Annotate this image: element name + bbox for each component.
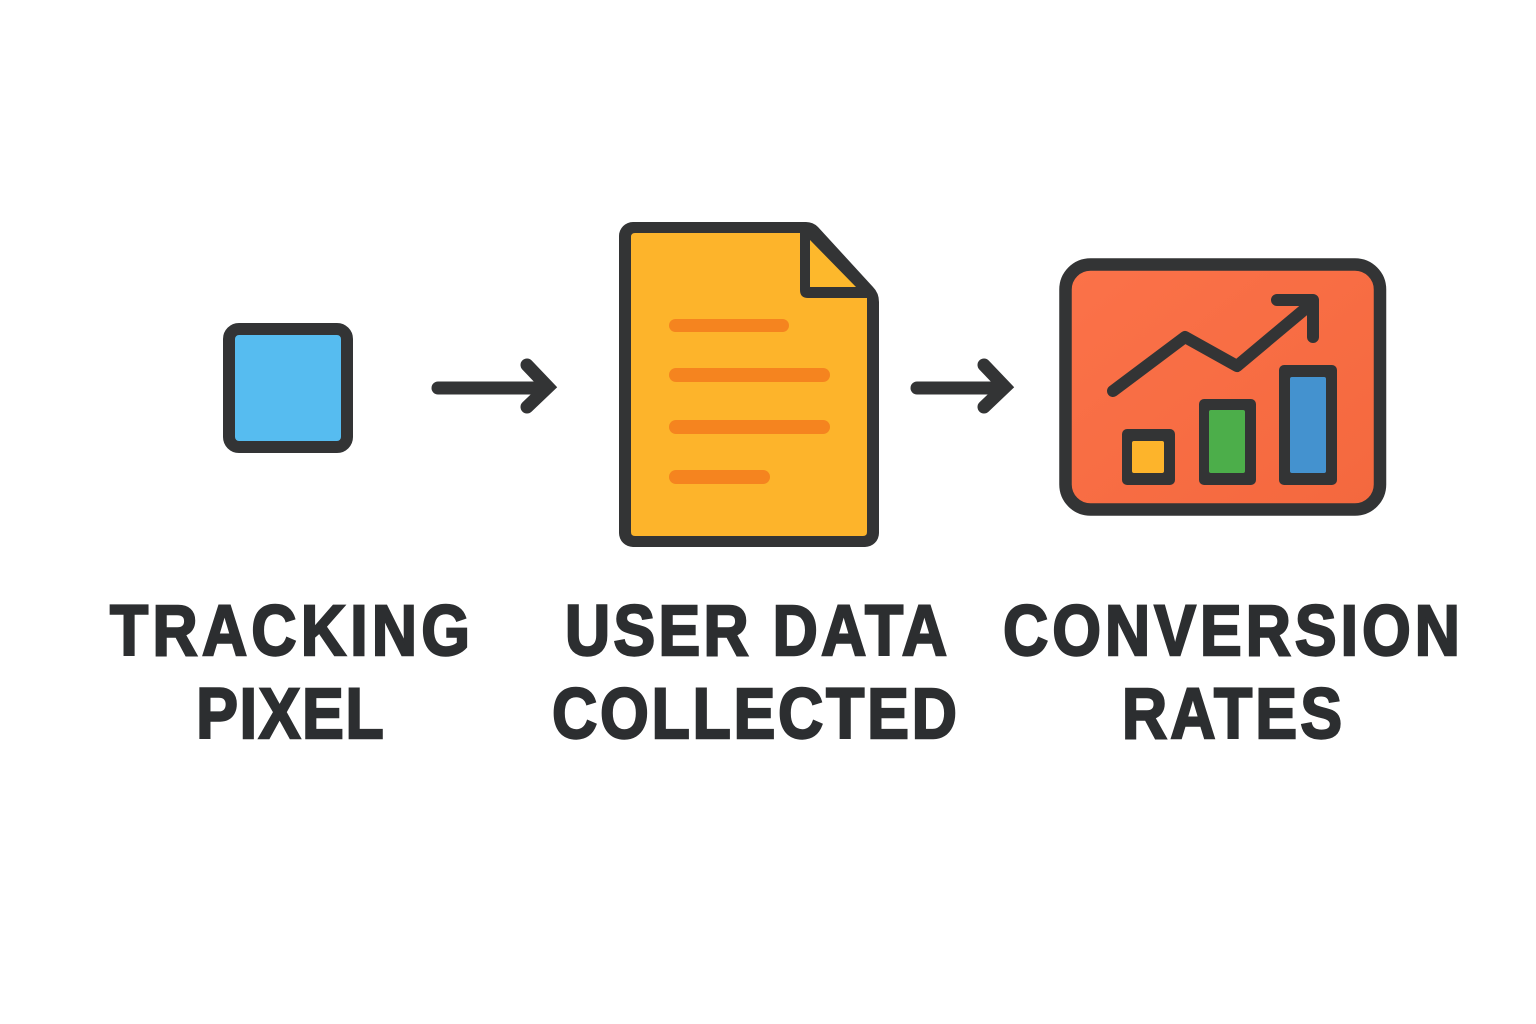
label: conversion rates: RATES	[1122, 674, 1342, 754]
icon: tracking pixel	[229, 329, 347, 447]
label: user data collected	[552, 591, 957, 754]
label: tracking pixel: PIXEL	[196, 674, 384, 754]
label: tracking pixel: TRACKING	[110, 591, 470, 671]
label: user data collected: USER DATA	[565, 591, 947, 671]
arrow: pixel to data	[438, 365, 548, 407]
label: conversion rates: CONVERSION	[1003, 591, 1460, 671]
label: tracking pixel	[110, 591, 470, 754]
icon: conversion chart	[1066, 264, 1380, 510]
arrow: data to conversion	[917, 365, 1005, 407]
icon: document	[619, 222, 879, 547]
label: user data collected: COLLECTED	[552, 674, 957, 754]
label: conversion rates	[1003, 591, 1460, 754]
